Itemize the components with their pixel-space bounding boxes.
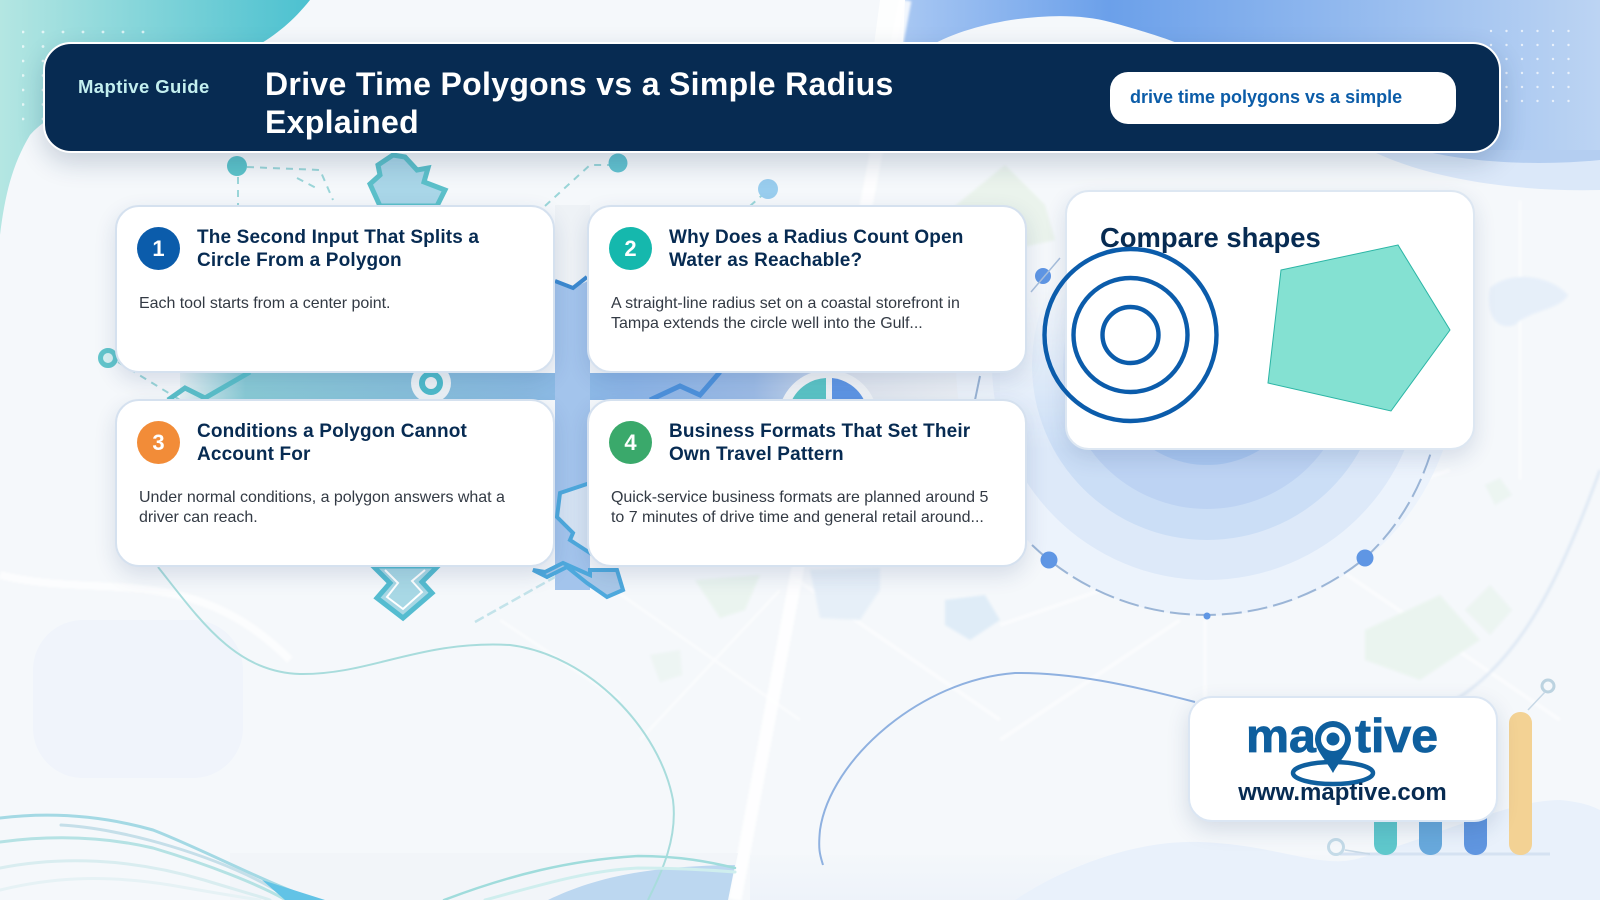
- logo wordmark: tive: [1355, 709, 1438, 762]
- badge 1: [137, 227, 180, 270]
- panel: card 2: [587, 205, 1027, 373]
- logo url: www.maptive.com: [1237, 779, 1447, 806]
- white dome: [930, 16, 1185, 150]
- badge 3: [137, 421, 180, 464]
- badge 2: [609, 227, 652, 270]
- top-right blue blob: [898, 0, 1600, 150]
- compare shapes chart: [1042, 244, 1450, 424]
- search pill: [1110, 72, 1456, 124]
- logo wordmark: [1246, 709, 1438, 762]
- bar chart decoration: [1328, 680, 1554, 855]
- logo pin: [1293, 721, 1373, 784]
- panel: card 1: [115, 205, 555, 373]
- header bar: [43, 42, 1501, 153]
- maptive logo: [1237, 709, 1447, 806]
- blue swoosh line: [819, 673, 1195, 865]
- card 3 heading: Conditions a Polygon Cannot Account For: [197, 421, 467, 465]
- soft pale panel: [33, 620, 243, 778]
- drive time polygon: [1268, 245, 1450, 411]
- card 2 heading: Why Does a Radius Count Open Water as Reachable?: [669, 227, 964, 271]
- pie icon: [778, 370, 878, 470]
- badge 1: 1: [152, 236, 165, 261]
- panel: card 3: [115, 399, 555, 567]
- panel: card 4: [587, 399, 1027, 567]
- badge 4: 4: [624, 430, 637, 455]
- badge 4: [609, 421, 652, 464]
- compare heading: Compare shapes: [1100, 222, 1321, 253]
- card 4 text: Quick-service business formats are planned around 5 to 7 minutes of drive time and general retail around...: [611, 489, 988, 526]
- card 4 heading: Business Formats That Set Their Own Travel Pattern: [669, 421, 970, 465]
- badge 3: 3: [152, 430, 165, 455]
- top-left teal blob: [0, 0, 310, 235]
- radius rings behind panel: [956, 114, 1458, 620]
- map nodes and dashed routes: [100, 154, 1060, 403]
- logo card: [1188, 696, 1498, 822]
- concentric radius circles: [1044, 249, 1216, 421]
- badge 2: 2: [624, 236, 637, 261]
- title: Drive Time Polygons vs a Simple Radius Explained: [265, 66, 894, 140]
- central blue map area: [180, 373, 1000, 400]
- card 3 text: Under normal conditions, a polygon answers what a driver can reach.: [139, 489, 505, 526]
- drive-time polygons peeking behind cards: [168, 155, 720, 622]
- card 1 heading: The Second Input That Splits a Circle From a Polygon: [197, 227, 479, 271]
- panel: compare shapes: [1065, 190, 1475, 450]
- flowing wave lines: [0, 815, 735, 900]
- teal swoosh line: [158, 567, 674, 900]
- card 2 text: A straight-line radius set on a coastal storefront in Tampa extends the circle well into the Gulf...: [611, 295, 960, 332]
- decorative dot grids: [22, 22, 147, 132]
- header kicker: Maptive Guide: [78, 76, 210, 97]
- card 1 text: Each tool starts from a center point.: [139, 295, 390, 312]
- bottom area: [230, 853, 738, 900]
- logo wordmark: ma: [1246, 709, 1317, 762]
- search pill: drive time polygons vs a simple: [1130, 87, 1402, 107]
